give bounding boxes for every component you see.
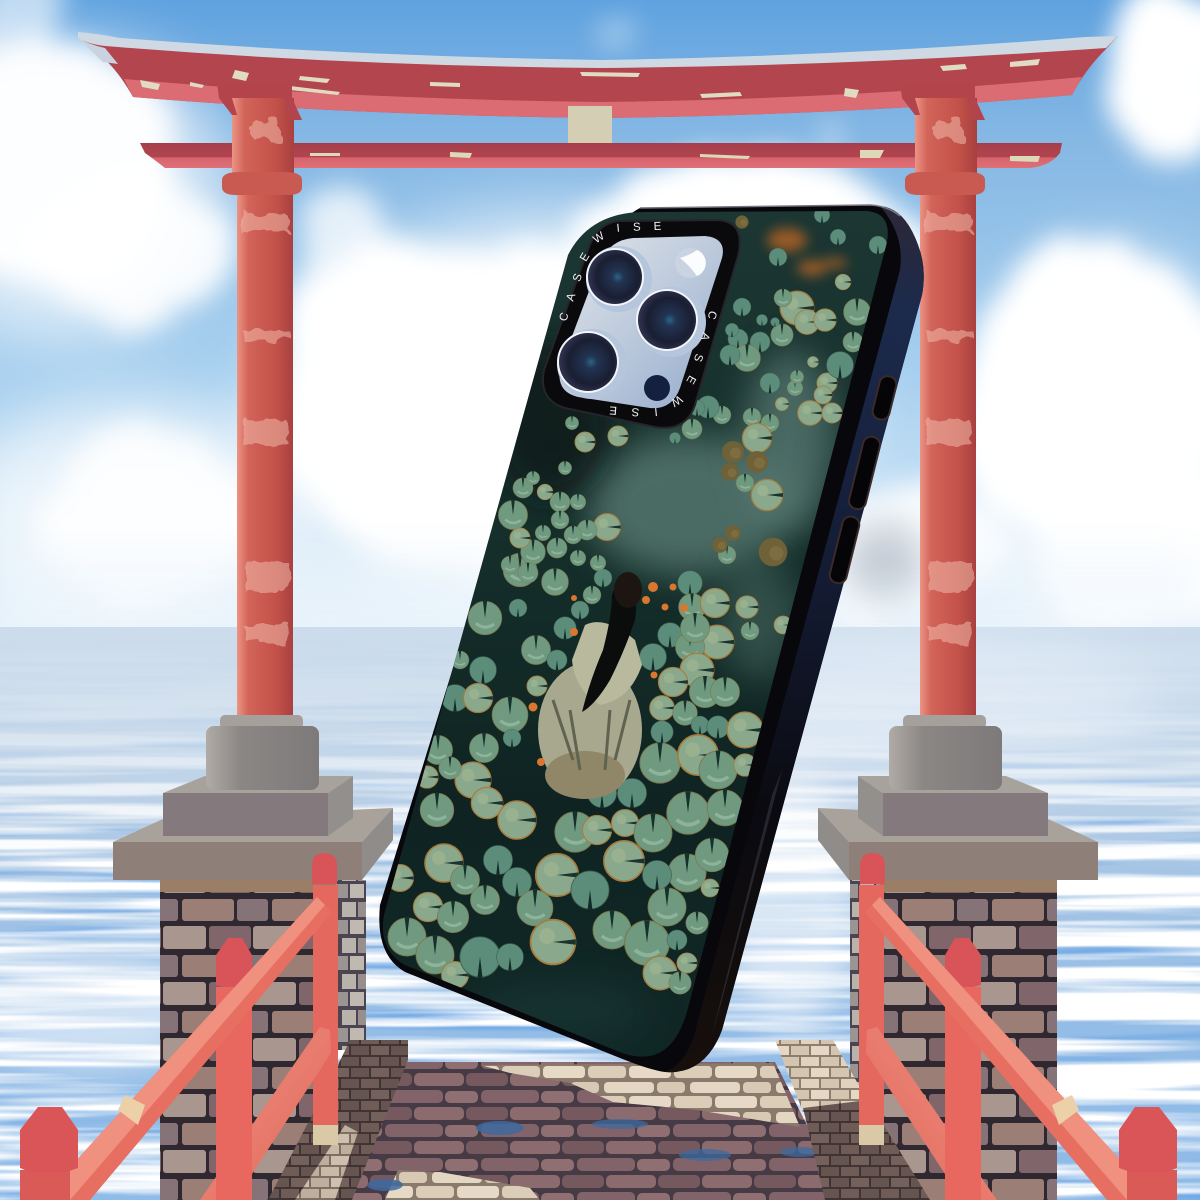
phone body	[379, 205, 924, 1072]
brand text: CASEWISE	[560, 222, 661, 320]
brand text: CASEWISE	[610, 312, 716, 416]
torii lower beam	[140, 143, 1062, 168]
torii top beam	[78, 32, 1118, 118]
top edge highlight	[640, 205, 900, 216]
camera bump	[542, 219, 741, 429]
lily pads	[387, 207, 887, 994]
right torii column	[889, 83, 1002, 790]
right pillar brick base	[850, 880, 1057, 1200]
left railing	[20, 853, 338, 1200]
water	[0, 627, 1200, 1200]
lens: middle	[636, 287, 706, 357]
camera plate	[559, 236, 723, 408]
woman in a dress	[538, 572, 642, 799]
orange blossoms	[528, 582, 688, 766]
left pillar brick base	[160, 880, 366, 1200]
orange leaves	[767, 228, 847, 276]
lens: top	[586, 246, 652, 312]
brand text	[560, 222, 716, 416]
lens: bottom	[557, 329, 627, 399]
phone	[379, 204, 924, 1072]
left torii column	[206, 83, 319, 790]
horizon haze	[0, 550, 1200, 630]
walkway right curb	[775, 1040, 930, 1200]
cloud shadow beside the phone	[845, 520, 925, 600]
torii center strut	[568, 106, 612, 144]
sky background	[0, 0, 1200, 640]
right stone footing	[818, 776, 1098, 880]
left stone footing	[113, 776, 393, 880]
walkway left curb	[268, 1040, 408, 1200]
walkway	[352, 1062, 845, 1200]
phone side face	[665, 206, 924, 1072]
sensor	[644, 375, 670, 401]
right railing	[859, 853, 1177, 1200]
printed artwork	[370, 200, 900, 1070]
cloud haze	[0, 40, 1200, 630]
clouds	[0, 0, 1200, 630]
side buttons	[828, 374, 898, 585]
flash	[675, 248, 706, 278]
side reflection	[712, 770, 782, 1035]
